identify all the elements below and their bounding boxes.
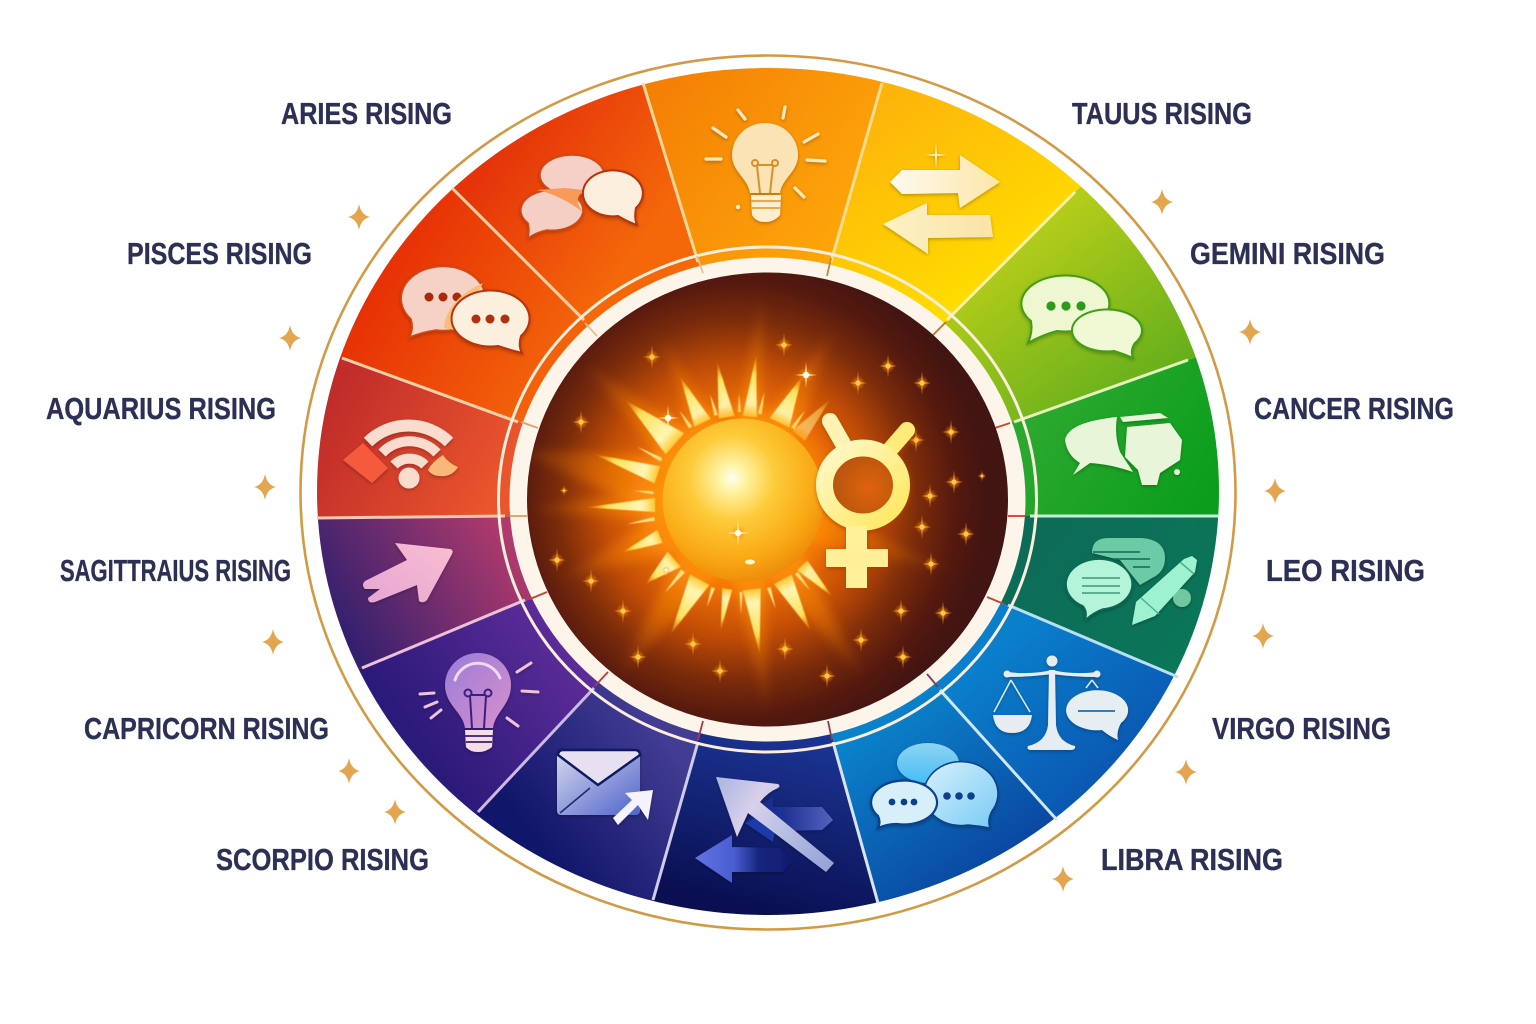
label: Scorpio: SCORPIO RISING bbox=[216, 842, 429, 877]
icon: Aquarius wifi bbox=[343, 426, 458, 488]
label: Capricorn: CAPRICORN RISING bbox=[84, 711, 329, 746]
label: Pisces: PISCES RISING bbox=[127, 236, 312, 271]
icon: yellow swap arrows bbox=[883, 143, 1000, 254]
label: Cancer: CANCER RISING bbox=[1254, 391, 1454, 426]
label: Virgo: VIRGO RISING bbox=[1212, 711, 1391, 746]
label: Sagittarius: SAGITTRAIUS RISING bbox=[60, 553, 291, 588]
icon: Capricorn light bulb bbox=[420, 653, 538, 752]
wheel: outer gold ring bbox=[300, 56, 1236, 930]
sun rays bbox=[532, 317, 986, 694]
label: Libra: LIBRA RISING bbox=[1101, 842, 1283, 877]
icon: Sagittarius arrow bbox=[363, 543, 453, 602]
icon: Gemini chat bubbles bbox=[1021, 276, 1142, 358]
label: Leo: LEO RISING bbox=[1266, 553, 1425, 588]
label: Aquarius: AQUARIUS RISING bbox=[46, 391, 276, 426]
sun sphere bbox=[657, 412, 829, 588]
icon: Leo chat bubbles and pen bbox=[1066, 538, 1197, 625]
dark space disc bbox=[527, 272, 1008, 726]
decorative gold stars bbox=[254, 189, 1286, 892]
icon: Aries chat bubbles bbox=[521, 155, 643, 238]
center disc: sun and Mercury symbol bbox=[500, 272, 1008, 726]
Mercury symbol bbox=[824, 421, 907, 588]
label: Gemini: GEMINI RISING bbox=[1190, 236, 1385, 271]
icon: Libra chat bubbles bbox=[871, 743, 998, 828]
icon: Virgo scales bbox=[993, 656, 1128, 750]
icon: orange light bulb bbox=[706, 107, 825, 222]
icon: big arrows bbox=[695, 777, 834, 883]
icon: Cancer speech shapes bbox=[1065, 413, 1182, 485]
icon: Scorpio envelope bbox=[557, 750, 653, 825]
scattered sparkles bbox=[643, 345, 661, 369]
wheel: coloured segments bbox=[317, 68, 1219, 915]
label: Taurus: TAUUS RISING bbox=[1072, 96, 1252, 131]
segment dividers bbox=[317, 83, 1219, 903]
icon: Pisces chat bubbles bbox=[401, 266, 530, 353]
label: Aries: ARIES RISING bbox=[281, 96, 452, 131]
inner ring bbox=[498, 247, 1036, 752]
